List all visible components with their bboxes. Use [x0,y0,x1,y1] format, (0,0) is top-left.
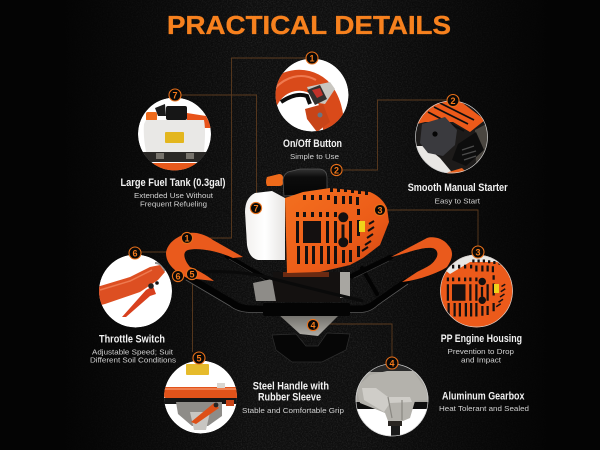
marker 5: 5 [189,269,195,279]
heading: On/Off Button [283,138,342,150]
description: Simple to Use [290,152,339,161]
heading: Steel Handle with [253,381,329,393]
description: Easy to Start [435,196,481,206]
marker 4 [307,319,319,331]
handle crossbar [263,303,350,316]
heading: Aluminum Gearbox [442,391,525,403]
right orange grip [391,237,452,282]
description: Different Soil Conditions [90,356,176,365]
connector lines [141,58,478,358]
badge 6: 6 [132,248,138,258]
fuel cap [266,174,283,186]
panel: smooth manual starter [408,94,508,206]
description [448,347,514,364]
heading [253,381,329,404]
description: Heat Tolerant and Sealed [439,404,529,413]
fuel tank [245,191,285,260]
engine base and mounts [253,272,350,302]
description: Adjustable Speed; Suit [92,348,174,357]
description: Frequent Refueling [140,200,207,208]
heading: PP Engine Housing [441,333,522,345]
heading: Throttle Switch [99,334,165,346]
description: and Impact [461,356,502,364]
heading: Large Fuel Tank (0.3gal) [120,177,226,189]
badge 5 [193,352,205,364]
title: PRACTICAL DETAILS [167,12,451,40]
gearbox [278,314,340,336]
panel: on/off button [268,52,348,161]
panel: large fuel tank [120,89,226,208]
detail circle: recoil starter [413,100,490,176]
fuel hose [203,272,363,301]
marker 4: 4 [310,320,316,330]
callout numbers on product [172,164,386,331]
panel: throttle switch [90,247,176,365]
marker 6: 6 [175,271,181,281]
detail circle: housing close-up [440,254,515,330]
detail circle: handle close-up [164,360,238,434]
orange engine housing [285,188,389,273]
warning label [359,221,365,232]
heading: Rubber Sleeve [258,392,321,404]
badge 4: 4 [389,358,395,368]
product: earth auger power head [166,169,452,362]
badge 2: 2 [450,96,456,106]
description: Prevention to Drop [448,347,514,356]
marker 1: 1 [184,233,190,243]
description [134,191,214,208]
detail circle: fuel tank close-up [138,98,212,172]
detail circle: gearbox casting [355,363,429,437]
badge 1: 1 [309,54,315,64]
marker 3 [374,204,386,216]
marker 2 [331,164,342,176]
panel: aluminum gearbox [355,357,529,437]
heading: Smooth Manual Starter [408,182,508,194]
panel: steel handle with rubber sleeve [164,352,344,434]
badge 7: 7 [172,90,178,100]
detail circle: throttle lever [97,254,172,328]
marker 7 [250,202,262,214]
marker 2: 2 [334,165,339,175]
description: Stable and Comfortable Grip [242,406,344,415]
badge 4 [386,357,398,369]
marker 3: 3 [377,205,383,215]
marker 6 [172,270,184,282]
description [90,348,176,365]
panel: PP engine housing [440,246,522,364]
marker 7: 7 [253,203,259,213]
left orange grip [166,233,243,281]
rear black frame tubes [227,256,391,294]
front frame tube [186,277,408,312]
detail circle: switch on handle [276,59,348,132]
description: Extended Use Without [134,191,214,200]
marker 1 [181,232,193,244]
recoil top cover [283,169,327,196]
auger blade mount [272,333,350,362]
badge 5: 5 [196,354,202,364]
badge 3: 3 [475,248,481,258]
marker 5 [186,268,198,280]
